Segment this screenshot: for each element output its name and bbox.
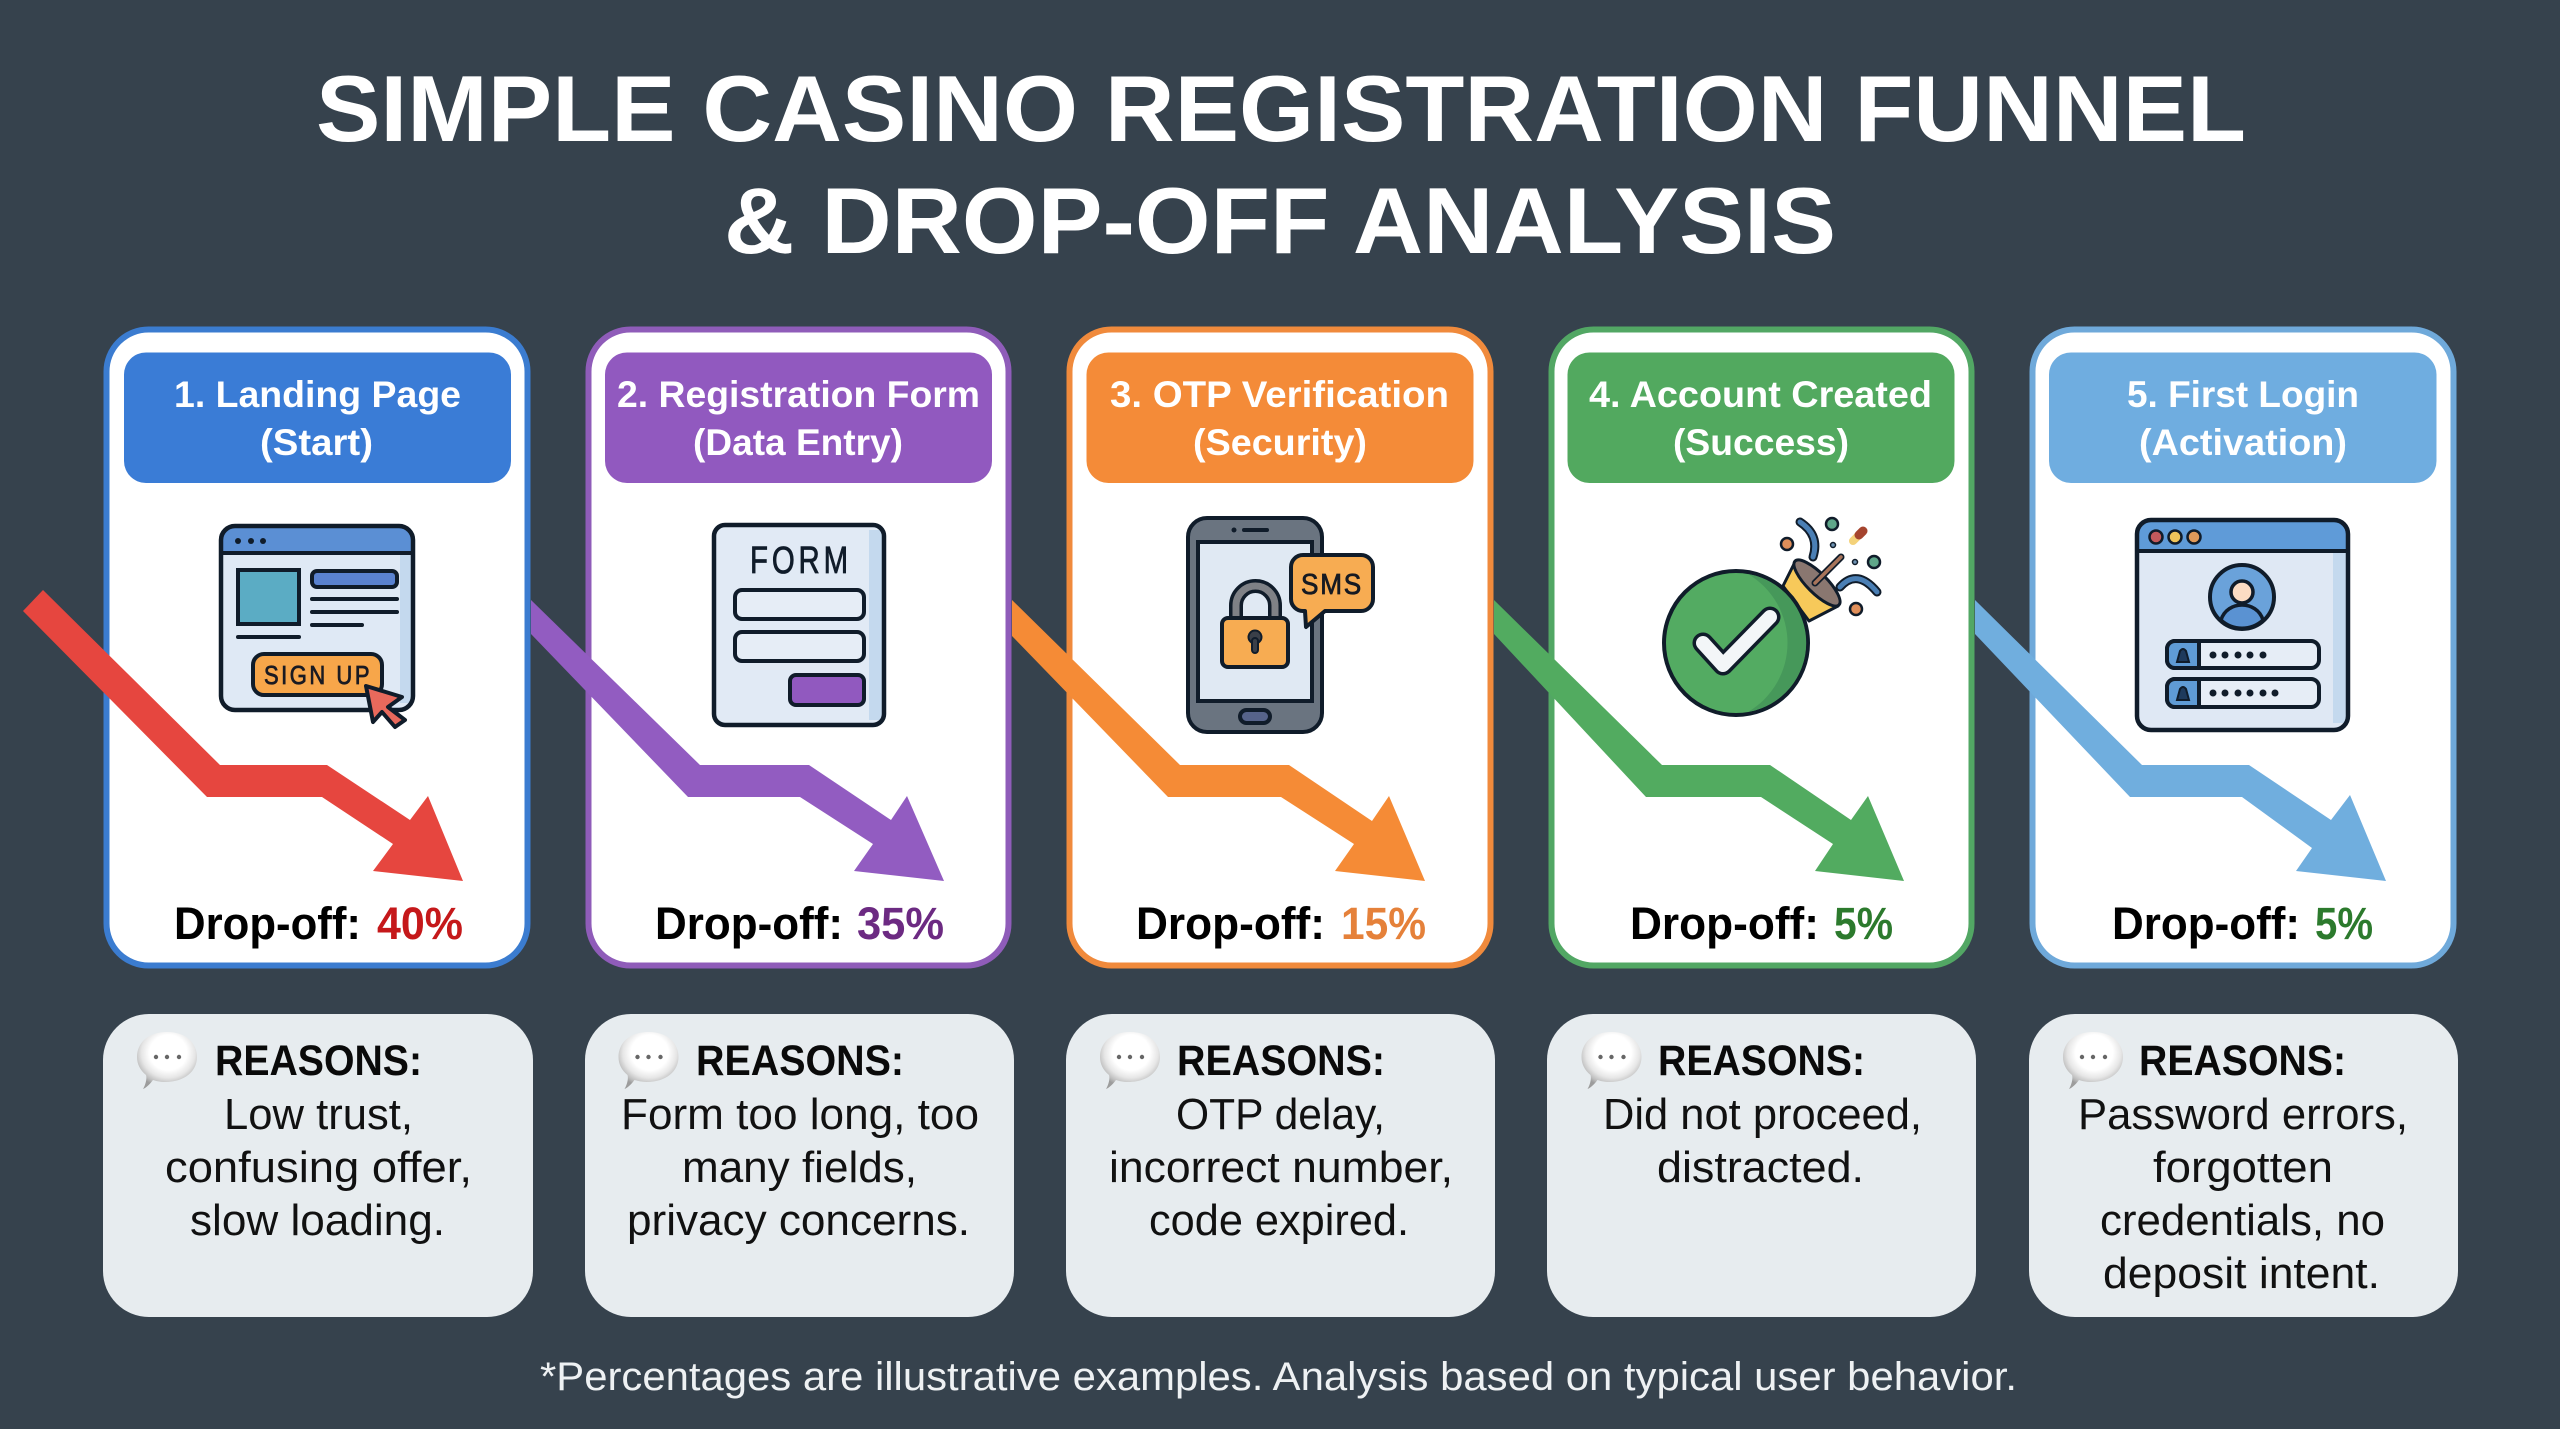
text: reasons heading: REASONS: <box>2139 1037 2346 1085</box>
text: reasons body: deposit intent. <box>2103 1249 2380 1298</box>
title: SIMPLE CASINO REGISTRATION FUNNEL <box>316 56 2246 161</box>
icon: browser sign up page: SIGN UP <box>264 660 372 690</box>
text: reasons body <box>2078 1090 2408 1298</box>
drop-off label: 15%: Drop-off: <box>1136 898 1325 949</box>
text: reasons body: OTP delay, <box>1176 1090 1385 1139</box>
text: reasons body: privacy concerns. <box>627 1196 970 1245</box>
panel: reasons 3 <box>1066 1014 1495 1317</box>
drop-off label: 35%: 35% <box>857 898 944 949</box>
heading: step 5: 5. First Login <box>2127 374 2359 415</box>
icon: speech bubble <box>2063 1032 2123 1089</box>
drop-off label: 15%: 15% <box>1341 898 1426 949</box>
text: reasons heading: REASONS: <box>696 1037 904 1085</box>
heading: step 1 <box>124 352 511 483</box>
heading: step 4: 4. Account Created <box>1589 374 1932 415</box>
panel: step 4 account created <box>1552 330 1972 966</box>
arrow: step 5 drop (blue) <box>1975 600 2386 881</box>
icon: login window <box>2137 520 2348 730</box>
arrow: step 3 drop (orange) <box>1012 600 1425 881</box>
icon: speech bubble <box>618 1032 678 1089</box>
heading: step 2: (Data Entry) <box>693 422 903 463</box>
footnote: *Percentages are illustrative examples. Analysis based on typical user behavior. <box>540 1355 2017 1399</box>
drop-off label: 40% <box>174 898 463 949</box>
panel: reasons 1 <box>103 1014 533 1317</box>
text: reasons body: credentials, no <box>2100 1196 2385 1245</box>
text: reasons heading: REASONS: <box>215 1037 422 1085</box>
text: reasons body <box>165 1090 472 1245</box>
text: reasons body: Form too long, too <box>621 1090 979 1139</box>
heading: step 3: 3. OTP Verification <box>1110 374 1449 415</box>
arrow: step 4 drop (green) <box>1494 600 1904 881</box>
heading: step 5 <box>2049 352 2436 483</box>
text: reasons body <box>621 1090 979 1245</box>
text: reasons body: code expired. <box>1149 1196 1409 1245</box>
heading: step 5: (Activation) <box>2139 422 2347 463</box>
drop-off label: 40%: Drop-off: <box>174 898 361 949</box>
heading: step 1: (Start) <box>260 422 373 463</box>
text: reasons body: many fields, <box>682 1143 917 1192</box>
arrow: step 2 drop (purple) <box>531 600 944 881</box>
icon: speech bubble <box>137 1032 197 1089</box>
heading: step 3 <box>1086 352 1474 483</box>
text: reasons body: Did not proceed, <box>1603 1090 1922 1139</box>
drop-off label: 5%: 5% <box>1834 898 1893 949</box>
arrow: step 1 drop (red) <box>23 590 463 881</box>
drop-off label: 35% <box>655 898 944 949</box>
panel: reasons 4 <box>1547 1014 1976 1317</box>
icon: phone with lock and SMS <box>1188 518 1373 732</box>
text: reasons body: confusing offer, <box>165 1143 472 1192</box>
title <box>316 56 2246 273</box>
panel: step 5 first login <box>2032 330 2454 966</box>
text: reasons body: distracted. <box>1657 1143 1864 1192</box>
drop-off label: 35%: Drop-off: <box>655 898 843 949</box>
text: reasons body <box>1109 1090 1453 1245</box>
heading: step 4 <box>1568 352 1954 483</box>
icon: success check with party popper <box>1664 518 1880 715</box>
icon: speech bubble <box>1582 1032 1642 1089</box>
icon: speech bubble <box>1100 1032 1160 1089</box>
panel: reasons 2 <box>585 1014 1014 1317</box>
heading: step 1: 1. Landing Page <box>174 374 461 415</box>
drop-off label: 5%: Drop-off: <box>2112 898 2300 949</box>
drop-off label: 5%: 5% <box>2315 898 2373 949</box>
text: reasons heading: REASONS: <box>1177 1037 1385 1085</box>
panel: reasons 5 <box>2029 1014 2458 1317</box>
text: reasons heading: REASONS: <box>1658 1037 1865 1085</box>
panel: step 3 OTP verification <box>1070 330 1490 966</box>
text: reasons body: forgotten <box>2153 1143 2333 1192</box>
drop-off label: 40%: 40% <box>377 898 463 949</box>
title: & DROP-OFF ANALYSIS <box>724 168 1836 273</box>
text: reasons body: Password errors, <box>2078 1090 2408 1139</box>
panel: step 1 landing page <box>106 330 528 966</box>
text: reasons body: slow loading. <box>190 1196 445 1245</box>
text: reasons body: Low trust, <box>224 1090 413 1139</box>
drop-off label: 5%: Drop-off: <box>1630 898 1819 949</box>
text: reasons body <box>1603 1090 1922 1192</box>
text: reasons body: incorrect number, <box>1109 1143 1453 1192</box>
heading: step 2: 2. Registration Form <box>617 374 980 415</box>
drop-off label: 15% <box>1136 898 1426 949</box>
panel: step 2 registration form <box>588 330 1008 966</box>
heading: step 3: (Security) <box>1193 422 1367 463</box>
icon: form: FORM <box>750 540 852 582</box>
heading: step 4: (Success) <box>1673 422 1849 463</box>
heading: step 2 <box>605 352 992 483</box>
icon: phone with lock and SMS: SMS <box>1301 569 1363 601</box>
icon: form <box>714 525 884 725</box>
icon: browser sign up page <box>221 526 413 727</box>
